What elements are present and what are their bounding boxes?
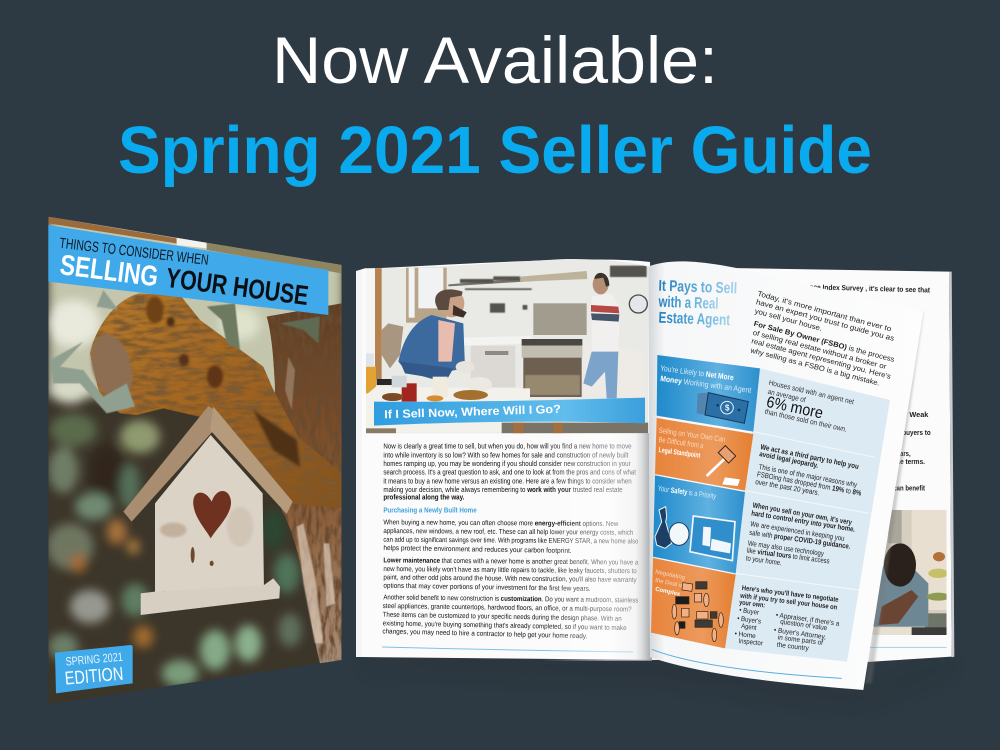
denim jacket <box>398 315 465 382</box>
leaf intro text <box>748 289 896 388</box>
row 1: net more money <box>657 355 855 434</box>
row 4 detail <box>734 585 840 653</box>
leaf intro text: have an expert you trust to guide you as <box>755 297 896 343</box>
row 4 detail: • Buyer <box>739 607 760 617</box>
row 1 detail: Houses sold with an agent net <box>768 378 855 406</box>
row 3 detail: When you sell on your own, it's very <box>752 500 853 527</box>
back page text fragments: nce Index Survey , it's clear to see that <box>809 282 931 295</box>
row 4: negotiating: the Deal is <box>655 578 683 589</box>
row 2 detail: avoid legal jeopardy. <box>759 449 819 470</box>
row 4 detail: with if you try to sell your house on <box>739 593 838 612</box>
branch texture <box>84 297 300 467</box>
row 4 detail: • Home <box>734 631 756 640</box>
banner line: things to consider when: THINGS TO CONSIDER WHEN <box>59 236 209 269</box>
left page footer rule <box>382 647 633 652</box>
row 3 detail <box>745 500 856 567</box>
row 1 detail: 6% more <box>765 394 825 423</box>
left page article text: new home, you likely won't have as many little repairs to tackle, like leaky faucets, shutters to <box>383 566 637 575</box>
dishwasher <box>471 346 515 387</box>
icon: virtual tour frame <box>690 516 735 561</box>
cover photo <box>47 217 343 707</box>
title line: Spring 2021 Seller Guide: Spring 2021 Seller Guide <box>118 113 872 188</box>
title line: Now Available: Now Available: <box>272 23 718 97</box>
leaf title: It Pays to Sell <box>658 278 737 297</box>
row 4 detail: Agent <box>741 623 757 632</box>
back page text fragments: ars, <box>900 449 911 458</box>
tree branch <box>90 293 342 508</box>
row 4 detail: question of value <box>780 619 828 632</box>
leaf intro text: why selling as a FSBO is a big mistake. <box>748 345 881 388</box>
leaf intro text: you sell your house. <box>754 306 823 333</box>
weathering marks <box>160 507 253 547</box>
row 3 detail: We are experienced in keeping you <box>750 519 845 543</box>
row 4 detail: • Buyer's Attorney, <box>773 627 827 641</box>
right counter <box>583 342 645 398</box>
icon: sanitizer spray <box>655 507 672 548</box>
row 2: legal standpoint: Selling on Your Own Can <box>658 426 726 444</box>
row 2 detail <box>755 442 863 498</box>
icon: dollar bill <box>697 393 748 423</box>
head <box>439 289 464 317</box>
oven <box>522 339 582 346</box>
left page article text: existing home, you're buying something that's already completed, so if you want to make <box>383 620 627 632</box>
row 2 detail: over the past 20 years. <box>755 477 820 497</box>
door frame <box>375 268 382 379</box>
left page article text: appliances, new windows, a new roof, etc. These can all help lower your energy costs, which <box>383 528 633 537</box>
row 4 detail: Here's who you'll have to negotiate <box>741 585 839 604</box>
back page text fragments <box>809 282 931 493</box>
birdhouse <box>123 406 293 615</box>
left page article text: can add up to significant savings over time. With programs like ENERGY STAR, a new home also <box>383 537 638 545</box>
left page article text: changes, you may need to hire a contractor to help get your home ready. <box>382 628 587 640</box>
left page article text: into while inventory is so low? With so few homes for sale and construction of newly built <box>383 452 628 459</box>
counter <box>463 336 532 346</box>
left page article text: helps protect the environment and reduces your carbon footprint. <box>383 545 572 555</box>
row 2: legal standpoint: Legal Standpoint <box>658 445 701 460</box>
left page article text: search process. It's a great question to ask, and one to look at from the pros and cons of what <box>383 470 636 477</box>
left page article text: steel appliances, granite countertops, hardwood floors, an office, or a multi-purpose room? <box>383 603 632 613</box>
kitchen shelf <box>448 278 534 286</box>
leaf title: Estate Agent <box>658 310 731 329</box>
table <box>366 387 530 432</box>
birdhouse perch base <box>141 578 280 615</box>
row 1: net more money: You're Likely to Net More <box>660 364 735 382</box>
back page text fragments: buyers to <box>902 428 931 437</box>
back right page <box>648 261 954 690</box>
back page text fragments: ple terms. <box>894 457 925 466</box>
oven glass panel <box>533 303 587 335</box>
bark highlights <box>285 357 335 643</box>
foliage background blur <box>47 217 343 687</box>
row dividers <box>736 432 875 590</box>
badge line: spring 2021: SPRING 2021 <box>65 650 124 669</box>
row 2 detail: FSBOing has dropped from 19% to 8% <box>756 469 863 498</box>
row 4 detail: • Buyer's <box>737 615 762 626</box>
row 3 detail: to your home. <box>745 553 782 567</box>
breakfast food <box>377 361 492 402</box>
row 1 detail <box>764 378 855 434</box>
row 3 detail: We may also use technology <box>747 538 825 558</box>
left page article text: Now is clearly a great time to sell, but when you do, how will you find a new home to move <box>383 444 632 451</box>
row 3 detail: like virtual tours to limit access <box>746 546 830 566</box>
leaf title <box>657 278 737 329</box>
leaf title: with a Real <box>657 294 719 313</box>
leaf intro text: Today, it's more important than ever to <box>756 289 892 333</box>
roof planks <box>123 406 215 522</box>
left page article text: options that may cover portions of your investment for the first few years. <box>383 583 591 593</box>
page stack edge <box>356 268 366 657</box>
row 1 detail: an average of <box>767 387 807 404</box>
row 3: safety: Your Safety is a Priority <box>657 484 717 501</box>
row 2: legal standpoint: Be Difficult from a <box>658 435 705 450</box>
row 2 detail: We act as a third party to help you <box>760 442 860 471</box>
magazine cover <box>47 217 343 707</box>
scuffs <box>162 547 214 592</box>
heading text: If I Sell Now, Where Will I Go? <box>384 403 561 421</box>
icon: dollar bill: $ <box>725 404 730 413</box>
row 1 detail: than those sold on their own. <box>764 407 848 434</box>
badge line: edition: EDITION <box>64 663 124 689</box>
row 4: negotiating: Complex <box>655 587 681 598</box>
info rows light panel <box>725 368 890 662</box>
window <box>406 268 447 323</box>
birdhouse body <box>155 435 264 598</box>
title <box>118 23 872 188</box>
banner line: selling: SELLING <box>58 249 160 293</box>
heart <box>193 491 231 538</box>
shadow beneath open magazine <box>365 660 950 704</box>
left page article text: it means to buy a new home versus an existing one. Here are a few things to consider when <box>383 478 632 485</box>
left page article text <box>382 444 639 640</box>
icon: gavel <box>707 446 740 486</box>
left page article text: Lower maintenance that comes with a newer home is another great benefit. When you have a <box>383 557 638 567</box>
leaf footer rule <box>652 649 842 678</box>
edition badge <box>55 645 133 693</box>
front leaf shadow <box>865 312 923 683</box>
left page article text: making your decision, while always remembering to work with your trusted real estate <box>383 487 623 494</box>
olive leaves <box>50 290 320 413</box>
row 4: negotiating <box>651 558 840 653</box>
row 2: legal standpoint <box>655 418 863 498</box>
row 4 detail: the country <box>776 642 809 653</box>
left page article text: professional along the way. <box>383 495 464 502</box>
towels <box>382 323 403 368</box>
left page article text: These items can be customized to your specific needs during the design phase. With an <box>383 612 622 623</box>
wall clock <box>629 295 647 313</box>
row 2 detail: This is one of the major reasons why <box>758 462 858 489</box>
back page text fragments: can benefit <box>893 484 925 493</box>
open magazine <box>356 258 660 661</box>
back page footer rule <box>865 646 947 649</box>
left page article text: Another solid benefit to new construction is customization. Do you want a mudroom, stainless <box>383 594 639 604</box>
banner line: your house: YOUR HOUSE <box>164 262 310 311</box>
leaf intro text: of selling real estate without a broker or <box>752 328 888 371</box>
row 4 detail: Inspector <box>738 638 764 648</box>
row 1: net more money: Money Working with an Agent <box>660 374 752 395</box>
floor pattern <box>502 423 648 433</box>
tree trunk <box>267 303 342 663</box>
row 4 detail: your own: <box>739 599 765 609</box>
right front leaf page <box>648 261 923 690</box>
row 4 detail: in some parts of <box>777 634 823 647</box>
row 3: safety <box>653 475 856 573</box>
back page photo: woman leaning <box>872 510 947 635</box>
icon: face mask <box>669 523 689 545</box>
man on the left <box>398 289 467 382</box>
top strip above banner <box>48 217 342 273</box>
cover title banner <box>48 225 328 315</box>
gutter shading <box>540 433 652 661</box>
leaf intro text: real estate agent representing you. Here's <box>750 336 892 381</box>
kitchen photo <box>366 258 649 435</box>
back page text fragments: y Weak <box>903 410 929 419</box>
leaf intro text: For Sale By Owner (FSBO) is the process <box>753 319 896 364</box>
left page article text: When buying a new home, you can often choose more energy-efficient options. New <box>383 519 619 528</box>
man on the right <box>583 273 620 398</box>
row 3 detail: hard to control entry into your home. <box>751 508 856 534</box>
left page article text: Purchasing a Newly Built Home <box>383 508 477 515</box>
left page article text: paint, and other odd jobs around the house. With new construction, you'll also have warranty <box>383 574 637 584</box>
row 4: negotiating: Negotiating <box>655 569 685 582</box>
icon: negotiation people diagram <box>672 582 723 642</box>
left page article text: homes ramping up, you may be wondering if you should consider new construction in your <box>383 461 631 468</box>
row 4 detail: • Appraiser, if there's a <box>775 612 840 628</box>
heading ribbon <box>374 398 645 426</box>
juice jug <box>366 367 376 393</box>
row 3 detail: safe with proper COVID-19 guidance. <box>749 528 851 551</box>
left page <box>362 260 660 660</box>
